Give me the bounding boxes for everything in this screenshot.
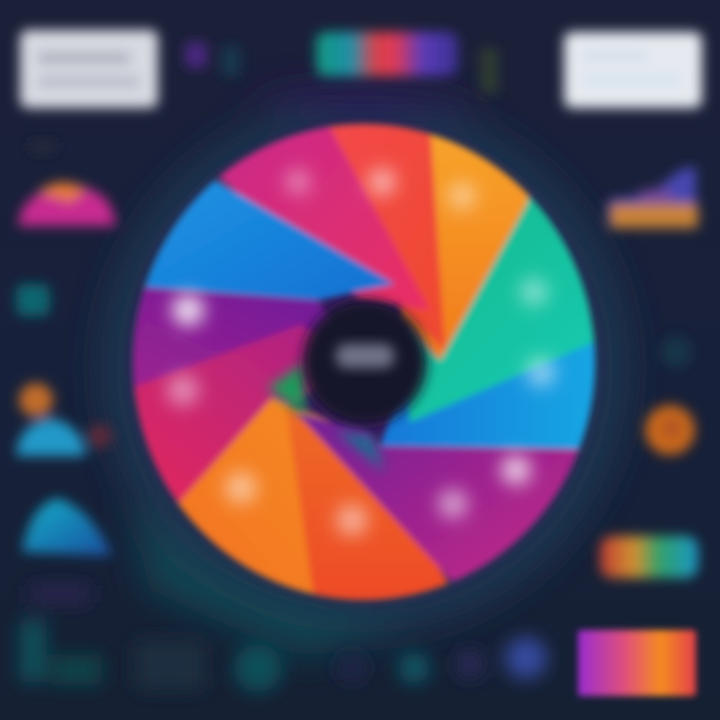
segment: blue — [140, 176, 397, 306]
icons: bottom row — [135, 637, 547, 692]
panel: top-right card — [564, 32, 702, 108]
hub — [303, 300, 427, 424]
segment: magenta — [214, 122, 432, 313]
icon: left cloud with orange — [16, 383, 112, 456]
chart: right colour strip — [600, 536, 698, 578]
segment: purple-magenta lower right — [294, 408, 584, 586]
panel: top-left card — [20, 30, 158, 108]
chart: top colour strip — [316, 32, 498, 94]
icon: right orange circle — [645, 405, 695, 455]
chart: left upper mound — [18, 142, 116, 226]
segment: pink red — [130, 322, 317, 507]
icon: left blue mound — [22, 498, 112, 556]
segment: orange lower left — [174, 394, 332, 598]
chart: bottom-left bars — [20, 585, 102, 685]
wheel base — [138, 130, 590, 594]
segment: blue right — [376, 338, 600, 456]
icon: right dim circle — [660, 336, 692, 368]
pie wheel — [128, 118, 600, 606]
segment: orange — [398, 130, 537, 366]
segment: red-orange bottom — [286, 407, 452, 606]
chart: bottom-right colour bar — [578, 630, 696, 696]
icon: left teal square — [16, 284, 50, 316]
segment: purple — [128, 281, 330, 390]
teal accent near hub — [268, 362, 305, 416]
icon: top small glyphs left — [185, 42, 240, 76]
wheel halo ring — [100, 82, 630, 655]
segment: red — [326, 118, 447, 348]
chart: right upper area — [608, 166, 698, 228]
segment: teal — [405, 192, 598, 424]
segment label blobs — [167, 168, 556, 536]
hub label blob — [336, 344, 394, 368]
